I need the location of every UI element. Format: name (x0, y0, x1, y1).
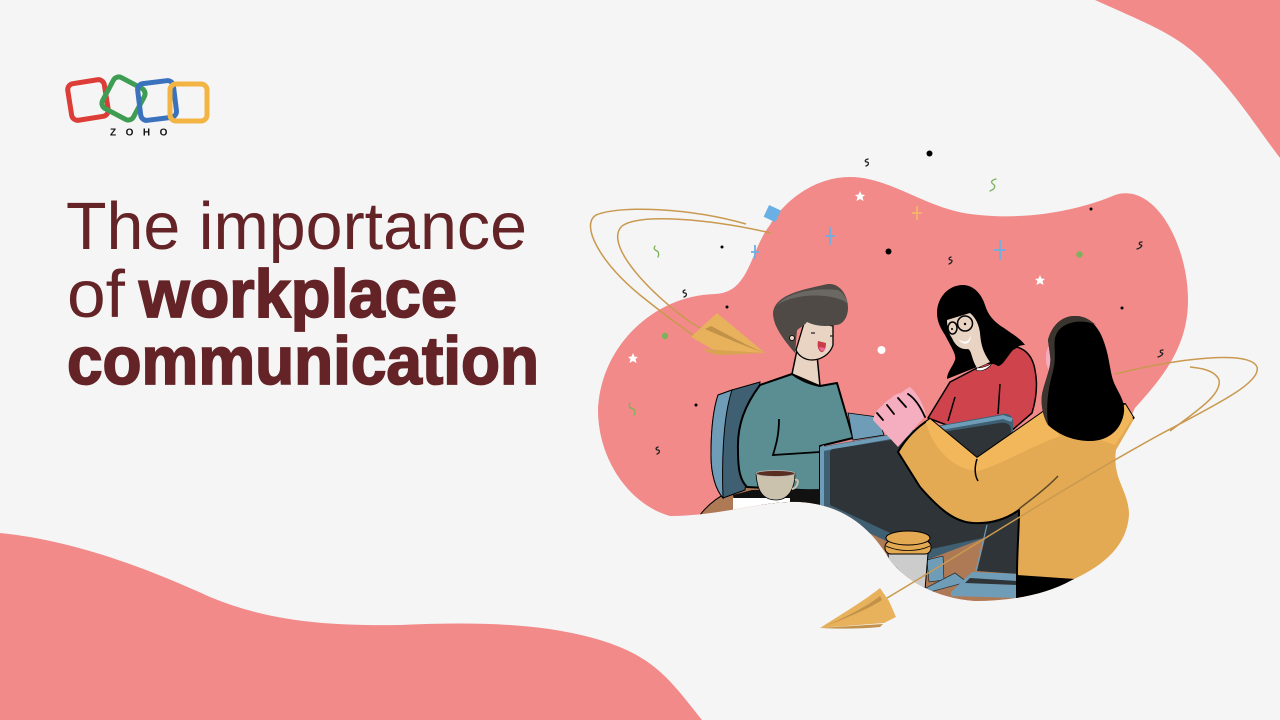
glasses (948, 316, 972, 334)
man's sweater (738, 374, 853, 491)
title: communication (67, 323, 539, 399)
woman (928, 285, 1036, 432)
man's hair (773, 284, 848, 353)
sweater highlights (926, 412, 1060, 471)
title (66, 189, 539, 399)
laptop behind (848, 413, 884, 440)
table (700, 487, 1020, 601)
man's chair (711, 382, 760, 498)
monitor frame (820, 414, 1013, 560)
illustration clipped to blob (700, 284, 1135, 601)
corner wave: top right (1095, 0, 1280, 158)
title: workplace (138, 256, 457, 332)
pink hand (873, 387, 926, 447)
corner wave: bottom left (0, 533, 702, 720)
man's neck (792, 350, 820, 386)
monitor screen (830, 423, 1011, 550)
right paper plane (820, 588, 896, 629)
right orbit trail (882, 358, 1257, 601)
woman's sweater (928, 347, 1036, 432)
back hair (1042, 316, 1124, 441)
ear (1046, 346, 1050, 370)
laptop screen (977, 508, 1019, 574)
confetti decorations (628, 150, 1163, 454)
coffee cup (756, 470, 798, 500)
logo: Zoho (67, 75, 207, 138)
left paper plane (691, 313, 765, 355)
woman's hair (937, 285, 1025, 379)
man's face (796, 320, 833, 360)
book (733, 489, 822, 505)
left paper plane trail (590, 209, 771, 352)
yellow-sweater person (897, 316, 1135, 598)
laptop on table (951, 572, 1019, 598)
sweater (897, 403, 1135, 598)
woman's face (947, 313, 990, 368)
monitor stand (927, 556, 944, 582)
logo: Zoho: ZOHO (110, 128, 177, 138)
man's mouth (818, 341, 826, 352)
title: of (67, 257, 125, 332)
monitor (820, 414, 1019, 598)
trousers (1017, 575, 1074, 598)
takeaway cup (885, 531, 931, 590)
man (738, 284, 853, 491)
pink blob backdrop (598, 177, 1188, 601)
title: The importance (66, 189, 527, 264)
